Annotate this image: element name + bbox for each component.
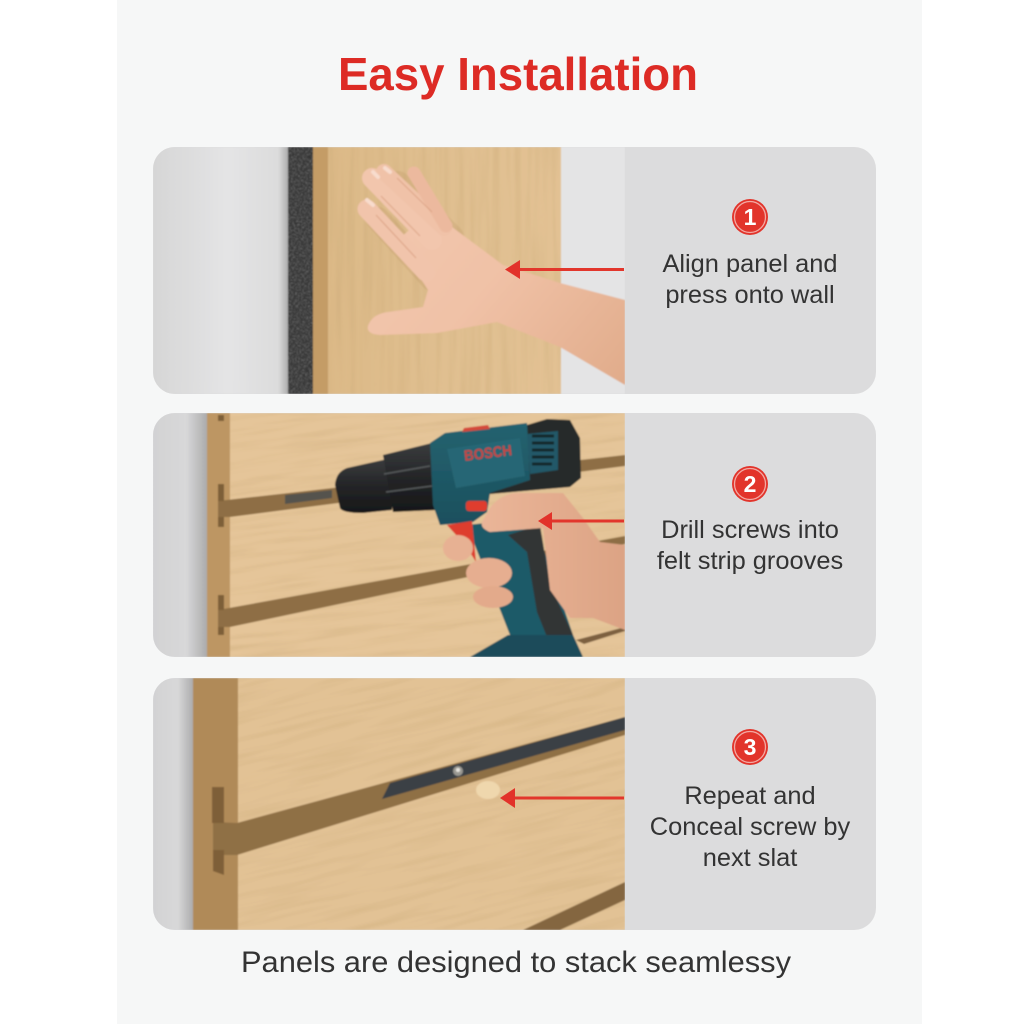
photo: slats concealing the screw	[154, 678, 625, 930]
number badge 2: 2	[744, 471, 756, 497]
panel: step 3	[153, 678, 876, 930]
panel: step 1	[153, 147, 876, 394]
panel: step 2	[153, 413, 876, 657]
drill bit	[285, 490, 332, 504]
slat notches	[212, 787, 224, 875]
title: Easy Installation	[338, 48, 698, 100]
number badge 1: 1	[744, 204, 757, 230]
photo: hand pressing panel onto wall	[153, 147, 625, 394]
step 3 text: next slat	[703, 844, 797, 872]
drill brand text: BOSCH	[463, 442, 513, 465]
number badge 2	[732, 466, 768, 502]
screw	[453, 766, 463, 776]
drill handle	[467, 518, 573, 635]
drill body	[430, 423, 530, 525]
step 1 text: Align panel and	[662, 250, 838, 278]
photo: hand drilling screws into grooves	[154, 413, 625, 657]
step 2 text: Drill screws into	[661, 516, 839, 544]
panel background	[153, 678, 876, 930]
step 3 text: Repeat and	[684, 782, 816, 810]
drill chuck	[335, 458, 392, 513]
panel background	[153, 147, 876, 394]
drill back housing	[480, 419, 581, 494]
felt strip	[382, 717, 625, 799]
page background	[117, 0, 922, 1024]
arrow	[500, 788, 624, 808]
arrow	[538, 512, 624, 530]
hand holding drill	[482, 493, 625, 630]
step 2 text: felt strip grooves	[657, 547, 843, 575]
arrow	[505, 260, 624, 279]
drill trigger and switch	[447, 521, 476, 562]
number badge 3	[732, 729, 768, 765]
number badge 3: 3	[744, 734, 756, 760]
step 3 text: Conceal screw by	[650, 813, 850, 841]
step 1 text: press onto wall	[665, 281, 835, 309]
panel background	[153, 413, 876, 657]
number badge 1	[732, 199, 768, 235]
caption: Panels are designed to stack seamlessy	[241, 946, 791, 979]
